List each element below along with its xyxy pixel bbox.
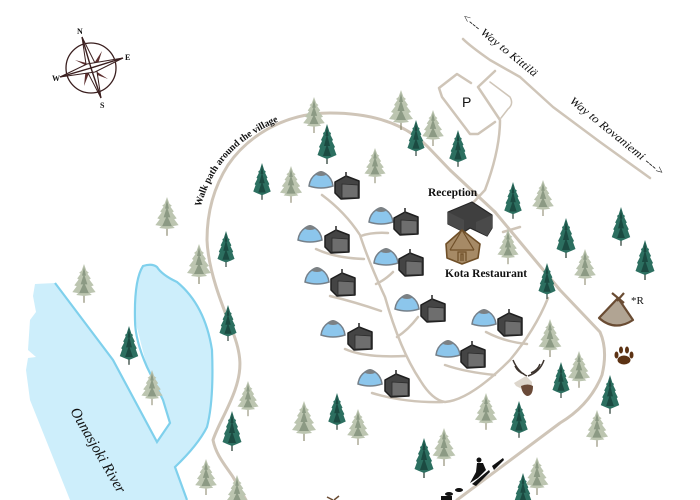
label: way to Kittilä: <--- Way to Kittilä [459, 11, 540, 80]
parking sign P: P [462, 94, 471, 110]
paw print [614, 346, 634, 364]
glamping unit 9 [436, 340, 485, 368]
glamping unit 2 [369, 207, 418, 235]
parking loop [439, 74, 495, 134]
glamping unit 5 [305, 267, 355, 296]
glamping unit 6 [395, 294, 445, 322]
glamping unit 7 [321, 320, 372, 350]
compass rose: S [100, 101, 105, 110]
label: way to Rovaniemi: Way to Rovaniemi ---> [567, 95, 666, 179]
parking inner path [490, 82, 512, 118]
walk path around the village [207, 113, 495, 500]
label: Reception: Reception [428, 187, 478, 199]
pale spruce trees [72, 90, 608, 500]
glamping unit 4 [374, 248, 423, 276]
parking access road [470, 71, 500, 206]
dark spruce trees [120, 120, 655, 500]
reception building [448, 202, 492, 236]
compass rose [52, 27, 130, 110]
label: Kota Restaurant: Kota Restaurant [445, 268, 527, 280]
glamping unit 3 [298, 225, 349, 253]
label: *R: *R [631, 295, 644, 307]
kota restaurant [446, 230, 480, 264]
glamping unit 8 [472, 309, 522, 336]
tipi [599, 293, 633, 326]
compass rose: W [52, 74, 60, 83]
small antlers [327, 496, 339, 500]
dog sled [441, 458, 504, 500]
right loop path [457, 212, 605, 500]
compass rose: N [77, 27, 83, 36]
inner village paths [316, 195, 548, 402]
label: Ounasjoki River: Ounasjoki River [67, 405, 128, 496]
glamping unit 1 [309, 171, 359, 199]
road to Kittilä and Rovaniemi [463, 39, 650, 178]
label: walk path around the village: Walk path around the village [194, 118, 278, 205]
reindeer head [513, 360, 544, 396]
compass rose: E [125, 53, 130, 62]
curve guide for walk path label [201, 119, 284, 207]
river [26, 265, 212, 500]
glamping unit 10 [358, 369, 409, 397]
